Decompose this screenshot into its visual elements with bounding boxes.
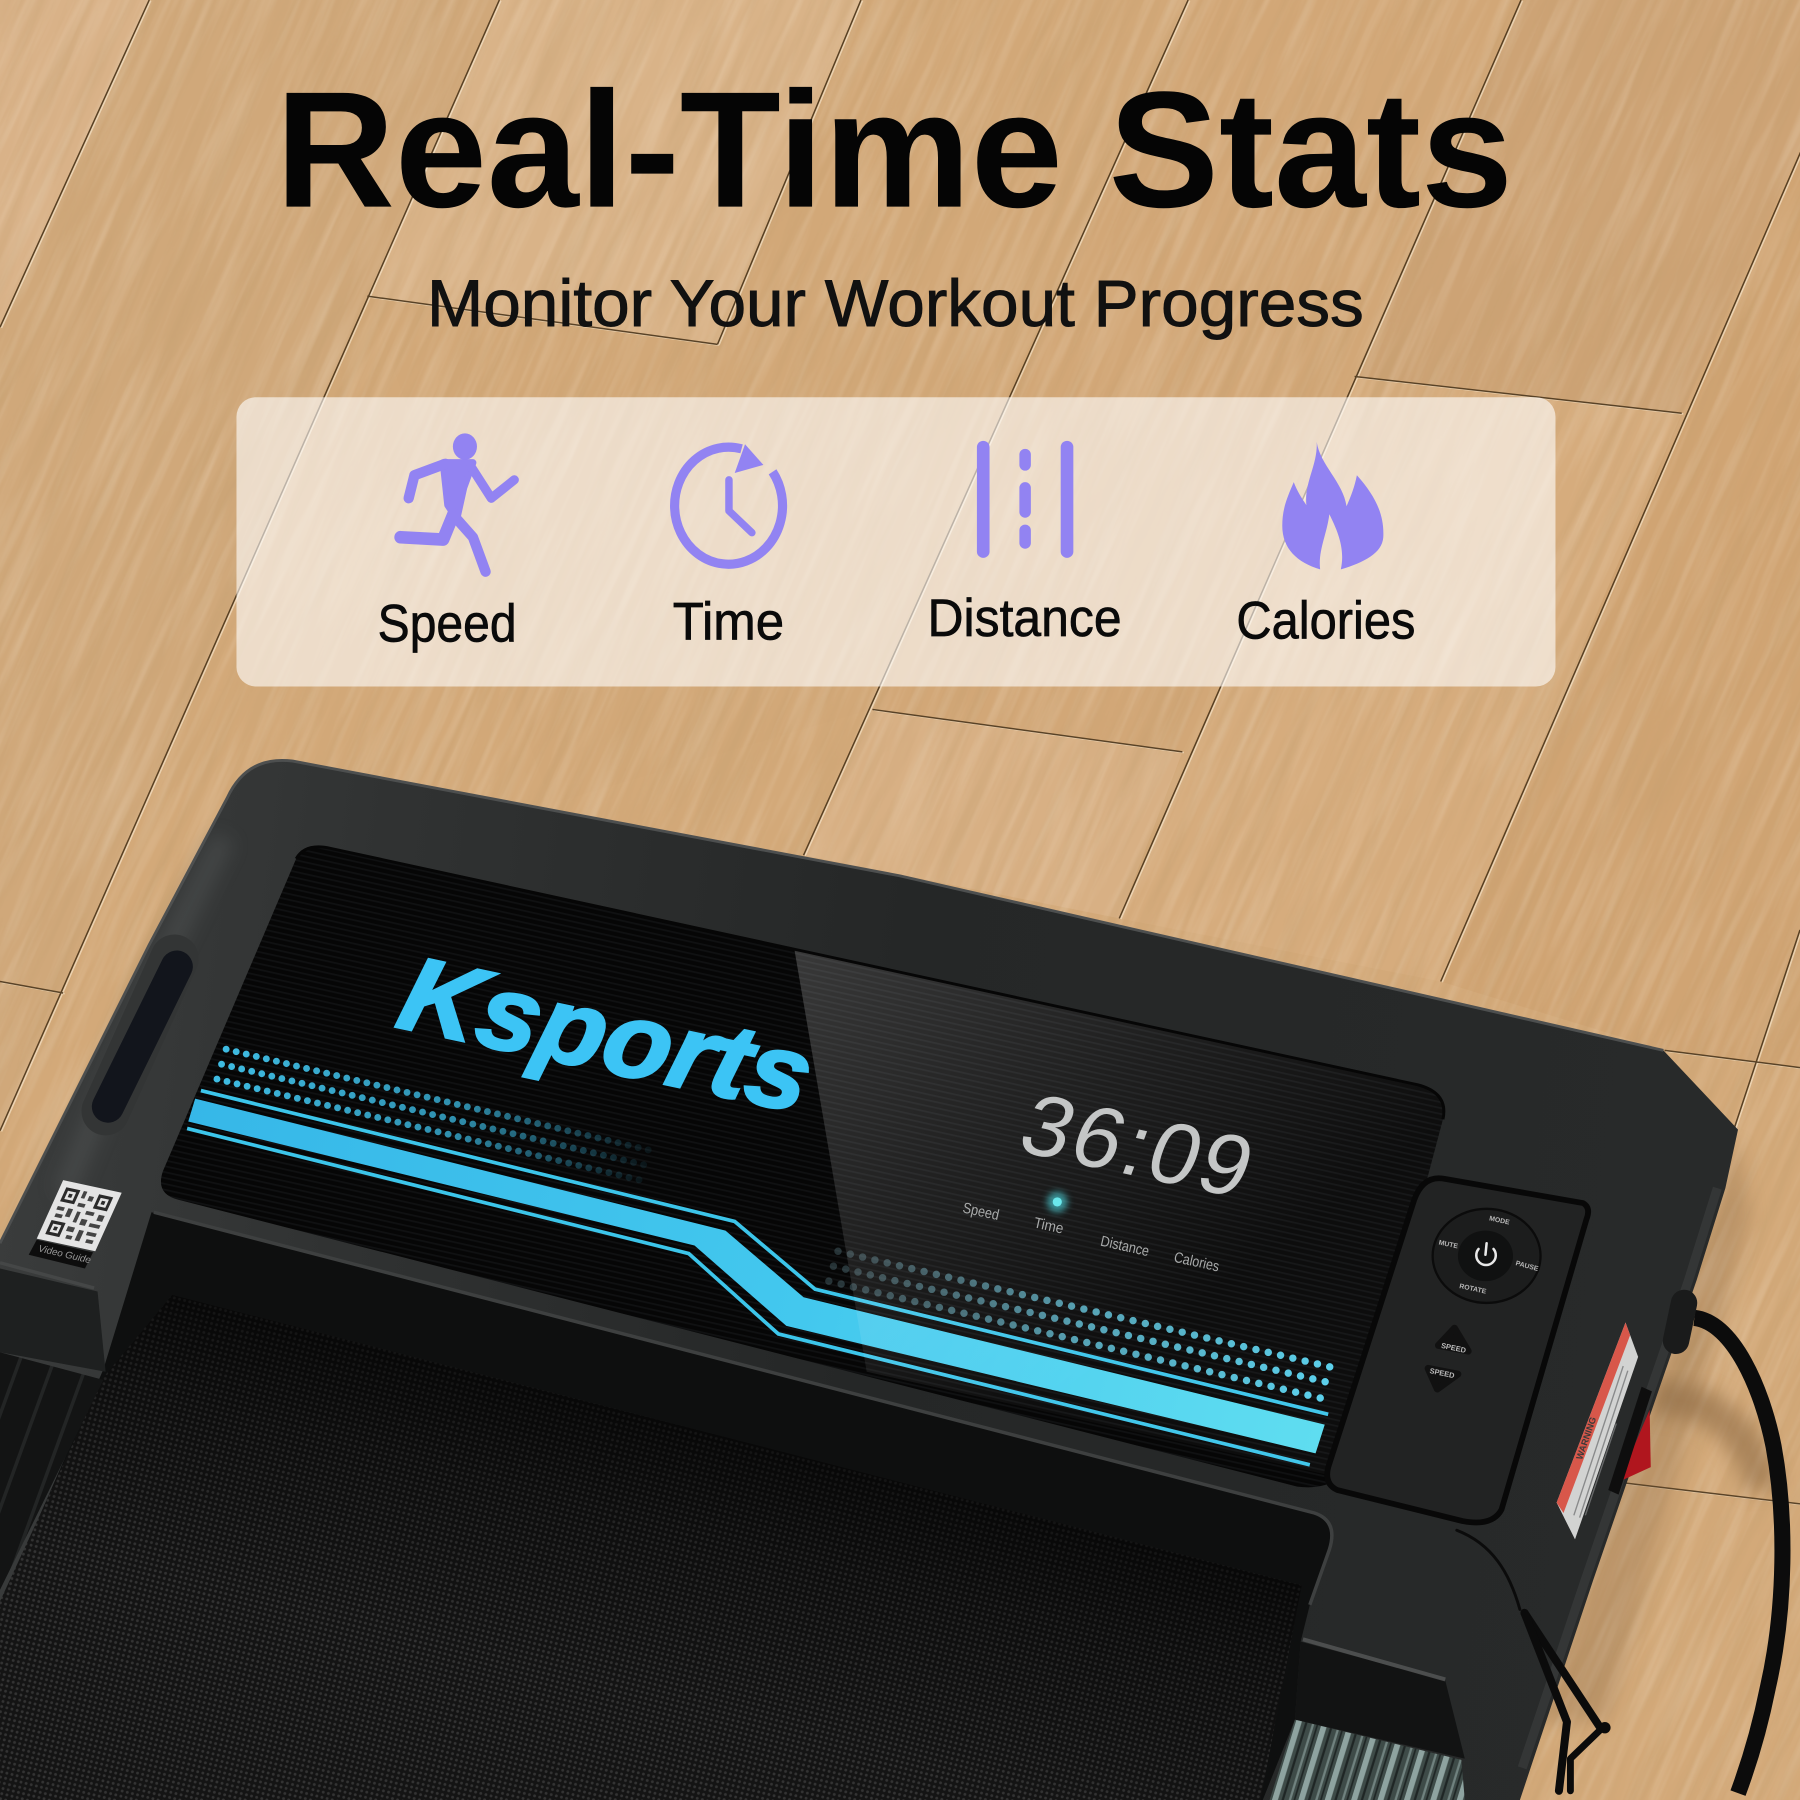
remote labels: PAUSE — [1515, 1260, 1539, 1273]
plug — [1676, 1303, 1684, 1341]
corner ledge — [1295, 1642, 1465, 1759]
lip highlight — [154, 1212, 1332, 1605]
panel edge — [296, 847, 1444, 1119]
label: calories: Calories — [1236, 591, 1415, 650]
remote control — [1327, 1178, 1588, 1522]
power cable — [1676, 1303, 1782, 1793]
timer display: 36:09 — [1008, 1076, 1267, 1216]
remote labels: MUTE — [1438, 1239, 1459, 1250]
speed up button — [1438, 1328, 1468, 1355]
front lip — [0, 1212, 1332, 1800]
subtitle: Monitor Your Workout Progress — [427, 267, 1364, 340]
warning label — [1557, 1322, 1638, 1539]
glass reflection — [794, 950, 1441, 1406]
dot pattern left — [217, 1049, 654, 1181]
power button — [1458, 1231, 1513, 1281]
left side rail — [0, 1352, 103, 1590]
console labels: Time — [1032, 1214, 1065, 1238]
label: distance: Distance — [928, 589, 1122, 648]
speed down button — [1428, 1366, 1458, 1389]
remote labels: MODE — [1488, 1215, 1511, 1227]
speed up button: SPEED — [1440, 1341, 1467, 1355]
dial — [1433, 1209, 1541, 1303]
treadmill body frame — [0, 760, 1738, 1800]
icon: clock (time) — [675, 444, 783, 564]
left ledge — [0, 1268, 106, 1372]
QR code label — [29, 1180, 122, 1268]
power switch — [1608, 1387, 1652, 1495]
brand logo: Ksports — [388, 934, 825, 1135]
treadmill — [0, 760, 1782, 1800]
safety strap — [1457, 1530, 1611, 1791]
left handle sensor — [106, 959, 177, 1111]
running belt — [0, 1295, 1302, 1800]
right side rail — [1270, 1720, 1465, 1800]
remote labels: ROTATE — [1459, 1283, 1487, 1296]
icon: runner (speed) — [401, 433, 514, 572]
icon: distance lanes — [977, 441, 1073, 558]
floor shadow — [1538, 1136, 1751, 1722]
panel: stats — [236, 397, 1555, 686]
console labels: Speed — [961, 1200, 1001, 1224]
body rim highlights — [0, 760, 1717, 1768]
label: speed: Speed — [378, 595, 517, 654]
cyan stripe — [187, 1091, 1328, 1465]
title: Real-Time Stats — [276, 58, 1513, 243]
remote labels — [1438, 1215, 1539, 1296]
indicator LED — [1047, 1192, 1068, 1212]
cable shadow on floor — [1653, 1398, 1763, 1490]
warning label: WARNING — [1574, 1416, 1598, 1461]
speed down button: SPEED — [1429, 1366, 1456, 1380]
icon: flame (calories) — [1282, 442, 1383, 569]
console labels: Distance — [1099, 1233, 1151, 1260]
QR code label: Video Guide — [37, 1243, 92, 1266]
console glass panel — [149, 827, 1458, 1515]
label: time: Time — [673, 592, 784, 651]
console labels — [961, 1200, 1221, 1275]
console labels: Calories — [1172, 1249, 1221, 1275]
dot pattern right — [829, 1251, 1336, 1399]
